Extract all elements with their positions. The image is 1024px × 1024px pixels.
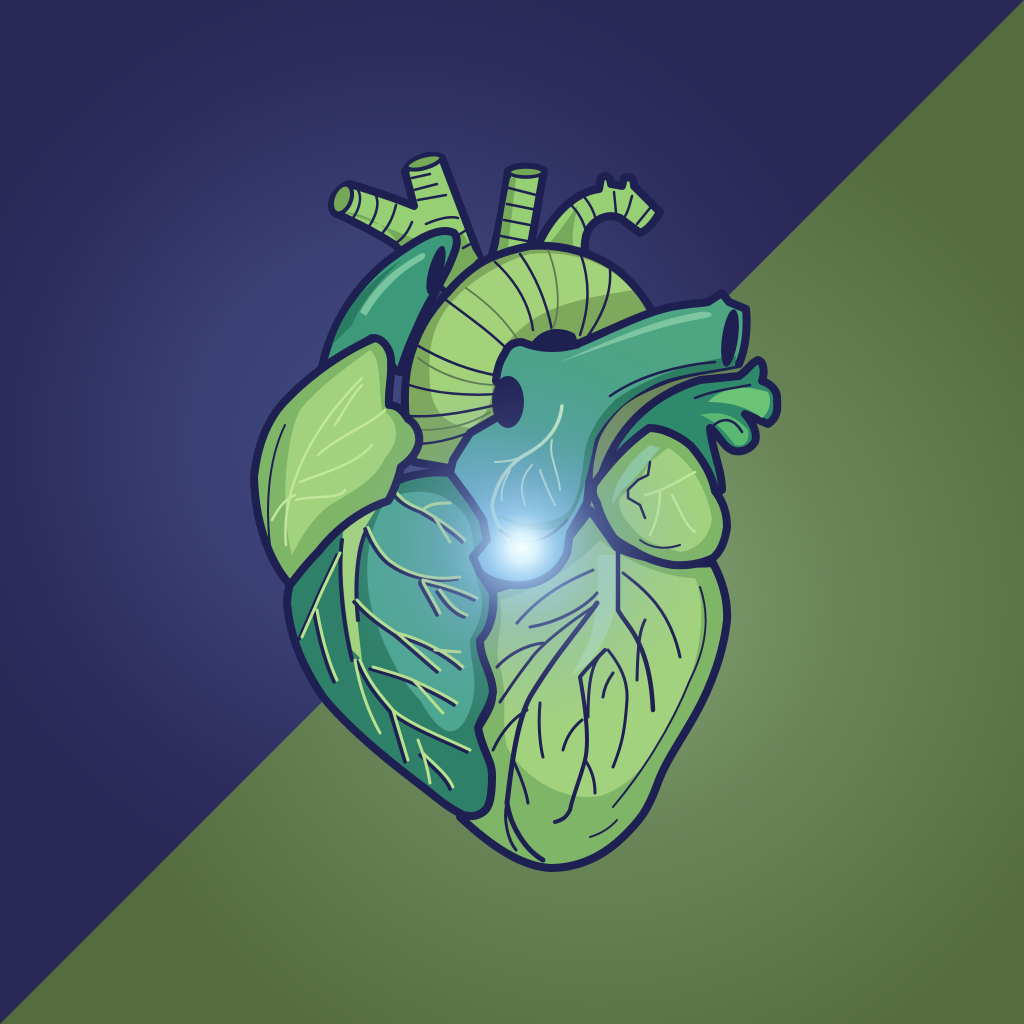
atrium: upper left dark green [322, 231, 457, 372]
heart [254, 151, 777, 868]
lobe: right auricle [593, 428, 727, 565]
vessel: right branch behind auricle [600, 360, 777, 500]
lobe: left auricle [254, 338, 419, 585]
vessel: central artery [490, 166, 544, 262]
ventricle: left teal [287, 472, 493, 816]
vessel: right aortic branch [535, 176, 660, 268]
aortic arch [405, 246, 652, 470]
vessel: upper left branching artery [328, 151, 480, 292]
ventricle: right light green [460, 510, 727, 868]
central blue glow [337, 363, 707, 733]
vessel: pulmonary trunk teal [450, 293, 747, 585]
